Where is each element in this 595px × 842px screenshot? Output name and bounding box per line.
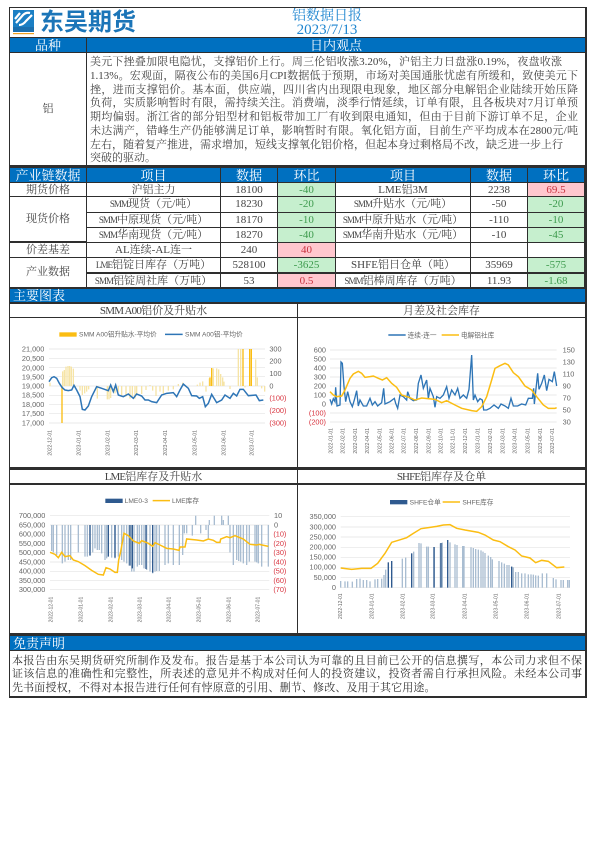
chart: monthly spread and social inventory: 2023-06-01 [538,428,544,454]
chart: monthly spread and social inventory: 2023-02-01 [488,428,494,454]
row: futures price: 沪铝主力 [132,184,176,196]
report title: 铝数据日报 [292,9,362,24]
chart: SHFE inventory and warrants [298,485,585,633]
chart: SHFE inventory and warrants: 350,000 [310,512,336,521]
chart: monthly spread and social inventory: 100 [314,390,326,399]
chart: LME inventory and premium: 2023-03-01 [137,597,143,622]
chart: SMM A00 price and premium: 300 [269,344,282,353]
commentary lines: 未达满产，错峰生产仍能够满足订单，影响暂时有限。氧化铝方面，目前生产平均成本在2800元/吨 [90,125,578,137]
label: aluminium [10,53,86,165]
row: daily inventory [87,258,584,272]
chart: SMM A00 price and premium: 2023-06-01 [221,430,227,456]
chart: monthly spread and social inventory [298,318,585,467]
chart: monthly spread and social inventory: 连续-连一 [408,330,437,339]
chart: SHFE inventory and warrants: SHFE仓单 [410,497,441,506]
chart: LME inventory and premium: (50) [273,567,286,576]
row: SMM south China: -45 [549,229,563,241]
chart: monthly spread and social inventory: 2022-08-01 [414,428,420,454]
chart: SMM A00 price and premium: 18,500 [22,391,44,400]
chart: SHFE inventory and warrants: 2023-04-01 [462,593,468,619]
chart: SHFE inventory and warrants: 2023-02-01 [401,593,407,619]
chart: LME inventory and premium: 2023-04-01 [167,597,173,622]
commentary lines: 突破的驱动。 [90,152,156,164]
chart: monthly spread and social inventory: 2023-03-01 [501,428,507,454]
chart: SMM A00 price and premium: 21,000 [22,345,44,354]
chart title: SHFE [298,470,585,483]
commentary lines: 1.13%。宏观面，隔夜公布的美国6月CPI数据低于预期，市场对美国通胀忧虑有所缓和，致使美元下 [90,70,578,82]
row: futures price: 2238 [488,184,510,196]
chart: SHFE inventory and warrants: 0 [332,583,336,592]
chart: monthly spread and social inventory: 400 [314,363,326,372]
chart: SHFE inventory and warrants: 250,000 [310,532,336,541]
category: spot price [10,197,86,241]
row: spread: 240 [241,244,257,256]
row: SMM south China: SMM华南升贴水（元/吨） [343,229,463,241]
row: weekly inventory: SMM铝棒周库存（万吨） [344,275,462,287]
chart: LME inventory and premium: 2023-02-01 [108,597,114,622]
heading: intraday view [87,38,585,52]
chart: LME inventory and premium [10,485,297,633]
heading: disclaimer: 免责声明 [13,636,65,651]
chart: monthly spread and social inventory: 200 [314,381,326,390]
chart title: SMM A00 [10,304,297,317]
row: daily inventory: SHFE铝日仓单（吨） [351,259,455,271]
chart: SHFE inventory and warrants: 2022-12-01 [338,593,344,619]
heading: variety: 品种 [35,38,61,53]
chart: LME inventory and premium: (20) [273,539,286,548]
commentary lines: 左右，随着复产推进，需求增加，短线支撑氧化铝价格，但起本身过剩格局不改，缺乏进一步上行 [90,139,563,151]
chart: LME inventory and premium: (60) [273,576,286,585]
row: weekly inventory: 0.5 [300,275,313,287]
row: SMM central China: -10 [549,214,563,226]
chart: SMM A00 price and premium: 2023-03-01 [134,430,140,456]
row: SMM spot: SMM现货（元/吨） [110,198,197,210]
row: spread [87,243,584,257]
chart: SMM A00 price and premium: 2023-04-01 [163,430,169,456]
commentary lines: 负荷，实质影响暂时有限，需持续关注。消费端，淡季行情延续，订单有限，且各板块对7月订单预 [90,97,578,109]
row: futures price [87,183,584,196]
data table [10,168,86,287]
chart: LME inventory and premium: 10 [274,511,282,520]
row: futures price: LME铝3M [378,184,428,196]
row: SMM spot: -20 [299,198,314,210]
table header row [87,168,584,182]
row: SMM spot: 18230 [235,198,263,210]
chart: SMM A00 price and premium: 2022-12-01 [47,430,53,456]
report date: 2023/7/13 [297,22,357,38]
chart: monthly spread and social inventory: 110 [563,369,574,378]
chart: LME inventory and premium: 350,000 [19,576,45,585]
chart: SMM A00 price and premium: SMM A00铝升贴水-平均价 [79,330,157,339]
chart: LME inventory and premium: (70) [273,585,286,594]
row: SMM south China: -10 [492,229,506,241]
text block: disclaimer: 证该信息的准确性和完整性，所表述的意见并不构成对任何人的投资建议，投资者需自行承担风险。未经本公司事 [12,668,582,680]
heading: main charts: 主要图表 [13,288,65,303]
chart: LME inventory and premium: 500,000 [19,548,45,557]
text block: disclaimer: 先书面授权，不得对本报告进行任何有悖原意的引用、删节、修改、及用于其它用途。 [12,682,436,694]
chart: monthly spread and social inventory: 130 [563,357,575,366]
chart: LME inventory and premium: 650,000 [19,520,45,529]
chart: SMM A00 price and premium: SMM A00铝-平均价 [185,330,243,339]
row: weekly inventory: 11.93 [487,275,511,287]
heading: intraday view: 日内观点 [310,38,362,53]
chart title: SMM A00: SMM A00铝价及升贴水 [100,305,207,317]
row: SMM central China: 18170 [235,214,263,226]
chart: LME inventory and premium: 0 [274,520,278,529]
chart: SHFE inventory and warrants: 2023-07-01 [557,593,563,619]
chart: LME inventory and premium: LME0-3 [125,498,148,505]
row: spread: AL连续-AL连一 [115,244,192,256]
chart: monthly spread and social inventory: 2023-05-01 [526,428,532,454]
row: daily inventory: 35969 [485,259,513,271]
chart: monthly spread and social inventory: 2022-12-01 [463,428,469,454]
chart: SMM A00 price and premium: 17,500 [22,409,44,418]
row: daily inventory: -575 [546,259,566,271]
chart: LME inventory and premium: (30) [273,548,286,557]
header band [10,8,585,37]
commentary lines: 挫，进而支撑铝价。基本面，供应端，四川省内出现限电现象，地区部分电解铝企业陆续开始压降 [90,84,578,96]
company name: 东吴期货 [40,9,136,36]
chart: SMM A00 price and premium: 20,500 [22,354,44,363]
chart: SHFE inventory and warrants: SHFE库存 [462,497,494,506]
row: SMM south China: 18270 [235,229,263,241]
chart: monthly spread and social inventory: 2023-04-01 [512,428,518,454]
commentary lines: 期均偏弱。浙江省的部分铝型材和铝板带加工厂有收到限电通知，但由于目前下游订单不足，企业 [90,111,578,123]
chart: monthly spread and social inventory: 2022-06-01 [390,428,396,454]
chart: monthly spread and social inventory: 30 [563,417,571,426]
chart: SMM A00 price and premium: 20,000 [22,363,44,372]
chart: SMM A00 price and premium: (300) [269,418,286,427]
category: futures price: 期货价格 [26,184,70,196]
chart: LME inventory and premium: 2023-01-01 [78,597,84,622]
row: daily inventory: LME铝锭日库存（万吨） [96,259,211,271]
row: SMM south China [87,228,584,242]
chart: LME inventory and premium: 2023-07-01 [256,597,262,622]
chart: monthly spread and social inventory: 2022-02-01 [341,428,347,454]
heading: main charts [10,289,585,302]
chart: SHFE inventory and warrants: 50,000 [314,573,336,582]
chart: monthly spread and social inventory: 2022-11-01 [451,428,457,454]
chart: SMM A00 price and premium: 0 [269,381,273,390]
label: aluminium: 铝 [42,103,54,115]
chart: SMM A00 price and premium: 17,000 [22,419,44,428]
company logo [13,10,34,34]
category: industry data [10,258,86,287]
row: SMM central China [87,213,584,227]
chart: SHFE inventory and warrants: 2023-01-01 [370,593,376,619]
row: SMM central China: SMM中原升贴水（元/吨） [343,214,463,226]
chart: monthly spread and social inventory: 2022-01-01 [328,428,334,454]
chart: monthly spread and social inventory: 2023-07-01 [550,428,556,454]
row: SMM central China: -10 [299,214,314,226]
commentary lines: 美元下挫叠加限电隐忧，支撑铝价上行。周三伦铝收涨3.20%，沪铝主力日盘涨0.19%，夜盘收涨 [90,56,562,68]
chart: LME inventory and premium: 700,000 [19,511,45,520]
row: weekly inventory: SMM铝锭周社库（万吨） [95,275,212,287]
category: spread: 价差基差 [26,244,70,256]
chart: monthly spread and social inventory: 电解铝社库 [461,330,495,339]
chart title: spread and social inventory [298,304,585,317]
chart: LME inventory and premium: 2023-05-01 [196,597,202,622]
category: spread [10,243,86,257]
chart: SMM A00 price and premium: 2023-01-01 [77,430,83,456]
chart: LME inventory and premium: (40) [273,557,286,566]
chart: SHFE inventory and warrants: 100,000 [310,563,336,572]
category: futures price [10,183,86,196]
row: SMM spot: -20 [549,198,563,210]
row: SMM south China: -40 [299,229,314,241]
chart: SMM A00 price and premium: 18,000 [22,400,44,409]
chart: SMM A00 price and premium: 2023-02-01 [106,430,112,456]
chart: monthly spread and social inventory: 2022-10-01 [438,428,444,454]
chart: SMM A00 price and premium: 200 [269,357,282,366]
chart: LME inventory and premium: 550,000 [19,539,45,548]
report frame [8,6,586,698]
chart: LME inventory and premium: 300,000 [19,585,45,594]
chart: monthly spread and social inventory: 500 [314,354,326,363]
chart: SMM A00 price and premium: 2023-05-01 [192,430,198,456]
chart: LME inventory and premium: LME库存 [172,496,199,505]
text block: disclaimer [10,651,585,696]
chart: LME inventory and premium: 450,000 [19,557,45,566]
row: SMM south China: SMM华南现货（元/吨） [99,229,208,241]
chart: LME inventory and premium: 600,000 [19,530,45,539]
chart: monthly spread and social inventory: 2022-03-01 [353,428,359,454]
chart: monthly spread and social inventory: 70 [563,393,571,402]
text block: daily commentary [87,53,585,165]
row: weekly inventory: -1.68 [545,275,567,287]
row: spread: 40 [301,244,312,256]
row: futures price: 69.5 [546,184,566,196]
chart: monthly spread and social inventory: 600 [314,345,326,354]
table heading: chain data: 产业链数据 [15,168,80,183]
chart: monthly spread and social inventory: (100) [309,408,326,417]
row: SMM spot [87,197,584,212]
chart: monthly spread and social inventory: 50 [563,405,571,414]
row: SMM spot: SMM升贴水（元/吨） [354,198,452,210]
chart title: SHFE: SHFE铝库存及仓单 [397,471,486,483]
chart: SMM A00 price and premium: 2023-07-01 [250,430,256,456]
chart: LME inventory and premium: 2022-12-01 [48,597,54,622]
chart: monthly spread and social inventory: 90 [563,381,571,390]
chart: SMM A00 price and premium: 19,000 [22,381,44,390]
chart: LME inventory and premium: 400,000 [19,567,45,576]
chart: monthly spread and social inventory: 2022-04-01 [365,428,371,454]
row: SMM central China: -110 [489,214,509,226]
row: SMM spot: -50 [492,198,506,210]
heading: variety [10,38,86,52]
row: weekly inventory [87,274,584,287]
chart: SHFE inventory and warrants: 200,000 [310,543,336,552]
row: weekly inventory: 53 [244,275,254,287]
row: daily inventory: -3625 [294,259,319,271]
chart: LME inventory and premium: 2023-06-01 [226,597,232,622]
chart: SHFE inventory and warrants: 2023-06-01 [525,593,531,619]
chart: monthly spread and social inventory: 2023-01-01 [476,428,482,454]
chart: monthly spread and social inventory: 0 [322,399,326,408]
chart: LME inventory and premium: (10) [273,530,286,539]
chart: monthly spread and social inventory: 2022-05-01 [377,428,383,454]
row: futures price: 18100 [235,184,263,196]
chart: SHFE inventory and warrants: 300,000 [310,522,336,531]
chart: monthly spread and social inventory: 2022-09-01 [426,428,432,454]
chart: monthly spread and social inventory: 300 [314,372,326,381]
chart title: LME [10,470,297,483]
chart: SMM A00 price and premium: (100) [269,394,286,403]
chart: SHFE inventory and warrants: 2023-05-01 [493,593,499,619]
category: industry data: 产业数据 [26,266,70,278]
chart: SMM A00 price and premium: 19,500 [22,372,44,381]
row: futures price: -40 [299,184,314,196]
heading: disclaimer [10,636,585,650]
category: spot price: 现货价格 [26,213,70,225]
commentary lines [90,56,578,164]
row: SMM central China: SMM中原现货（元/吨） [99,214,208,226]
text block: disclaimer: 本报告由东吴期货研究所制作及发布。报告是基于本公司认为可靠的且目前已公开的信息撰写，本公司力求但不保 [12,655,582,667]
row: daily inventory: 528100 [232,259,266,271]
chart title: spread and social inventory: 月差及社会库存 [403,305,480,317]
chart: monthly spread and social inventory: (200) [309,417,326,426]
chart: SMM A00 price and premium [10,318,297,467]
chart: SHFE inventory and warrants: 2023-03-01 [430,593,436,619]
chart: monthly spread and social inventory: 150 [563,345,575,354]
chart title: LME: LME铝库存及升贴水 [105,471,202,483]
chart: SMM A00 price and premium: 100 [269,369,282,378]
chart: SMM A00 price and premium: (200) [269,406,286,415]
chart: monthly spread and social inventory: 2022-07-01 [402,428,408,454]
chart: SHFE inventory and warrants: 150,000 [310,553,336,562]
